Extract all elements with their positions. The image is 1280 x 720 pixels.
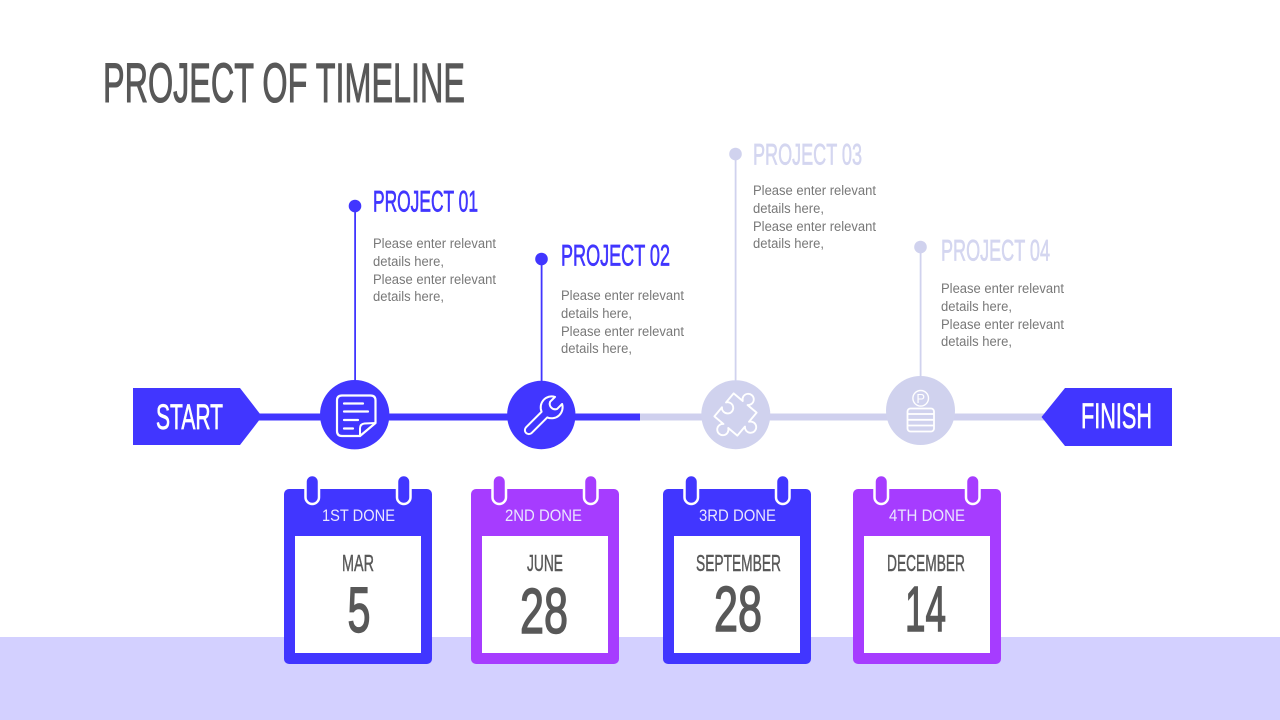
project 03 details: details here,: [753, 236, 824, 251]
project 04 details: details here,: [941, 334, 1012, 349]
milestone 2: wrench icon: [507, 381, 576, 449]
project 01 stem: [349, 200, 361, 381]
calendar 1: [284, 475, 432, 664]
project 02 details: details here,: [561, 306, 632, 321]
finish tag: FINISH: [1081, 397, 1152, 436]
project 01 details: details here,: [373, 289, 444, 304]
calendar 2 month: JUNE: [527, 550, 563, 576]
project 03 details: details here,: [753, 201, 824, 216]
calendar 3 month: SEPTEMBER: [696, 550, 781, 576]
bottom band: [0, 637, 1280, 720]
project 04 details: Please enter relevant: [941, 281, 1064, 296]
milestone 1: document icon: [320, 380, 389, 449]
calendar 1 month: MAR: [342, 550, 374, 576]
timeline: [133, 376, 1172, 450]
project 02 stem: [535, 253, 548, 381]
project 04 stem: [914, 241, 927, 377]
milestone 3: puzzle icon: [701, 380, 771, 450]
project 01 details: Please enter relevant: [373, 236, 496, 251]
project 04: [914, 234, 1064, 377]
calendar 3: [663, 475, 811, 664]
calendar 1 day: 5: [348, 574, 370, 646]
start tag: START: [156, 398, 223, 437]
project 01 details: details here,: [373, 254, 444, 269]
calendar 2 day: 28: [520, 575, 568, 647]
project 01: [349, 186, 496, 381]
calendar 3 rings: [684, 475, 790, 504]
calendar 3 day: 28: [714, 573, 762, 645]
calendar 1 rings: [306, 475, 410, 504]
project 03 details: Please enter relevant: [753, 183, 876, 198]
project 01 heading: PROJECT 01: [373, 186, 478, 218]
project 01 details: Please enter relevant: [373, 272, 496, 287]
project 02 details: Please enter relevant: [561, 324, 684, 339]
title: PROJECT OF TIMELINE: [103, 51, 465, 114]
project 03: [729, 138, 876, 381]
calendar 4 rings: [874, 475, 980, 504]
start tag: [133, 388, 262, 445]
calendar 2 label: 2ND DONE: [505, 506, 582, 525]
project 03 details: Please enter relevant: [753, 219, 876, 234]
milestone 4: coins icon: [886, 376, 955, 445]
project 02 details: [561, 288, 684, 356]
finish tag: [1042, 388, 1172, 446]
timeline bar: upcoming: [640, 414, 1045, 420]
project 03 details: [753, 183, 876, 251]
calendar 3 label: 3RD DONE: [699, 506, 776, 525]
project 04 details: Please enter relevant: [941, 317, 1064, 332]
project 03 heading: PROJECT 03: [753, 138, 862, 172]
calendar 4 day: 14: [905, 573, 946, 645]
calendar 1 label: 1ST DONE: [322, 506, 395, 525]
project 03 stem: [729, 148, 742, 381]
calendar 4 month: DECEMBER: [887, 550, 965, 576]
project 02 details: details here,: [561, 341, 632, 356]
project 02 heading: PROJECT 02: [561, 240, 670, 272]
project 01 details: [373, 236, 496, 304]
calendar 2: [471, 475, 619, 664]
project 04 heading: PROJECT 04: [941, 234, 1050, 268]
project 04 details: [941, 281, 1064, 349]
timeline bar: completed: [255, 414, 640, 420]
project 04 details: details here,: [941, 299, 1012, 314]
calendar 4 label: 4TH DONE: [889, 506, 965, 525]
calendar 4: [853, 475, 1001, 664]
project 02: [535, 240, 684, 381]
project 02 details: Please enter relevant: [561, 288, 684, 303]
calendar 2 rings: [492, 475, 598, 504]
milestone 4: coins icon: P: [916, 391, 925, 406]
